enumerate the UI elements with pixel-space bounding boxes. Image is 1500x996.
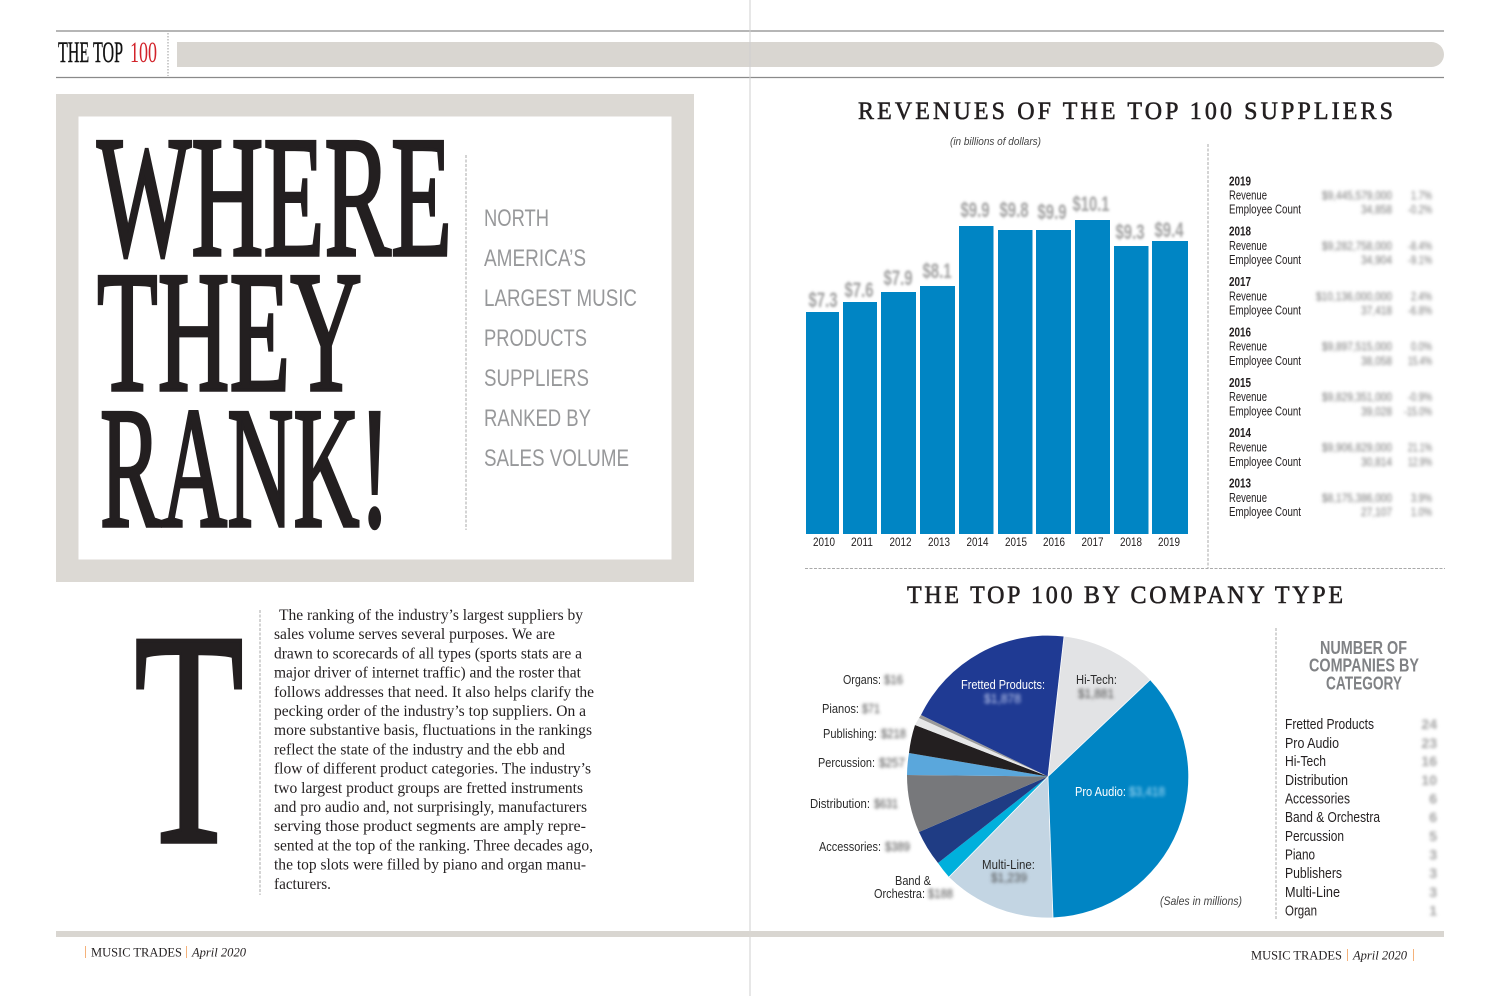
table: revenue and employee count by year: 2013 [1229, 476, 1251, 490]
subtitle: RANKED BY [484, 405, 591, 432]
category list: Multi-Line [1285, 885, 1340, 901]
table: revenue and employee count by year: $9,445,579,000 [1322, 188, 1392, 202]
subtitle: AMERICA’S [484, 245, 586, 272]
subtitle: LARGEST MUSIC [484, 285, 637, 312]
category values: 16 [1421, 753, 1437, 769]
table: revenue and employee count by year: 30,814 [1361, 455, 1392, 469]
table: revenue and employee count by year: Employee Count [1229, 404, 1301, 418]
bar values [808, 193, 1184, 312]
category heading [1309, 638, 1419, 694]
table: revenue and employee count by year: 12.9% [1408, 455, 1432, 469]
pie labels: Hi-Tech: [1076, 672, 1117, 687]
footer left: MUSIC TRADES [91, 944, 182, 960]
bar values: $9.3 [1116, 221, 1144, 244]
table: revenue and employee count by year: 27,107 [1361, 505, 1392, 519]
footer left [85, 944, 246, 960]
bar years [813, 535, 1180, 549]
table: revenue and employee count by year: 2.4% [1411, 290, 1432, 304]
table: revenue and employee count by year: 21.1% [1408, 440, 1432, 454]
body text: serving those product segments are amply repre- [274, 818, 586, 835]
footer right: MUSIC TRADES [1251, 948, 1342, 962]
table: revenue and employee count by year: -9.1% [1408, 253, 1432, 267]
table: revenue and employee count by year: Employee Count [1229, 304, 1301, 318]
category list: Organ [1285, 904, 1317, 920]
bar years: 2010 [813, 535, 835, 549]
table: revenue and employee count by year: Revenue [1229, 491, 1267, 505]
table: revenue and employee count by year: -0.2% [1408, 202, 1432, 216]
category values: 3 [1429, 884, 1437, 900]
table: revenue and employee count by year: $10,136,000,000 [1316, 290, 1392, 304]
body text: flow of different product categories. The industry’s [274, 761, 591, 778]
pie labels: Percussion: [818, 755, 875, 770]
bar years: 2014 [966, 535, 989, 549]
pie labels: Publishing: [823, 726, 877, 741]
pie labels: $71 [862, 701, 880, 716]
table: revenue and employee count by year: 39,028 [1361, 404, 1392, 418]
pie labels: $631 [874, 796, 898, 811]
table: revenue and employee count by year: $9,829,351,000 [1322, 390, 1392, 404]
table: revenue and employee count by year: 34,858 [1361, 202, 1392, 216]
subtitle: SALES VOLUME [484, 445, 629, 472]
category list [1285, 717, 1381, 920]
footer left: April 2020 [191, 944, 246, 960]
subtitle: PRODUCTS [484, 325, 587, 352]
pie labels: Pianos: [822, 701, 859, 716]
pie labels: $16 [884, 672, 903, 687]
footer right: April 2020 [1352, 948, 1407, 962]
category values: 6 [1429, 790, 1437, 806]
table: revenue and employee count by year: -0.9% [1408, 390, 1432, 404]
pie labels: $218 [881, 726, 906, 741]
table: revenue and employee count by year: 2017 [1229, 275, 1251, 289]
category heading: CATEGORY [1326, 674, 1402, 694]
table: revenue and employee count by year: Employee Count [1229, 505, 1301, 519]
table: revenue and employee count by year: Revenue [1229, 340, 1267, 354]
panel: title block [56, 94, 694, 582]
table: revenue and employee count by year: 1.7% [1411, 188, 1432, 202]
category list: Publishers [1285, 866, 1342, 882]
table: revenue and employee count by year: 1.0% [1411, 505, 1432, 519]
chart unit note: (in billions of dollars) [950, 136, 1041, 148]
body text: and pro audio and, not surprisingly, manufacturers [274, 799, 587, 816]
table: revenue and employee count by year: Employee Count [1229, 354, 1301, 368]
category values: 1 [1429, 902, 1437, 918]
table: revenue and employee count by year: 34,904 [1361, 253, 1392, 267]
bar values: $7.9 [884, 267, 912, 290]
pie labels: $1,878 [984, 691, 1021, 706]
bar values: $8.1 [922, 260, 952, 283]
bar values: $10.1 [1072, 193, 1110, 216]
headline: where they rank: WHERE [97, 102, 452, 293]
pie labels: Multi-Line: [982, 857, 1035, 872]
body text: follows addresses that need. It also helps clarify the [274, 684, 594, 701]
body text: sales volume serves several purposes. We are [274, 626, 555, 643]
bar years: 2013 [928, 535, 950, 549]
category values: 6 [1429, 809, 1437, 825]
pie labels: Accessories: [819, 839, 881, 854]
pie labels: $1,239 [991, 870, 1027, 885]
pie labels: Fretted Products: [961, 677, 1045, 692]
pie labels: Organs: [843, 672, 881, 687]
category heading: COMPANIES BY [1309, 656, 1419, 676]
pie chart: sales by company type [810, 636, 1188, 918]
subtitle: NORTH [484, 205, 549, 232]
category list: Band & Orchestra [1285, 810, 1381, 826]
body text: the top slots were filled by piano and organ manu- [274, 857, 586, 874]
table: revenue and employee count by year: Employee Count [1229, 253, 1301, 267]
category list: Distribution [1285, 773, 1348, 789]
table: revenue and employee count by year: 15.4% [1408, 354, 1432, 368]
table: revenue and employee count by year: $9,906,829,000 [1322, 440, 1392, 454]
panel: number of companies by category [1285, 638, 1437, 920]
pie labels: Pro Audio: [1075, 784, 1126, 799]
pie labels: $188 [928, 886, 953, 901]
heading: revenues: REVENUES OF THE TOP 100 SUPPLIERS [858, 97, 1393, 125]
body text: sented at the top of the ranking. Three decades ago, [274, 837, 593, 854]
body text: two largest product groups are fretted instruments [274, 780, 583, 797]
bar values: $9.9 [1038, 201, 1066, 224]
body text: major driver of internet traffic) and the roster that [274, 665, 582, 682]
pie labels: Band & [895, 873, 931, 888]
heading: company type: THE TOP 100 BY COMPANY TYPE [907, 581, 1343, 609]
category values [1421, 716, 1437, 918]
category list: Hi-Tech [1285, 754, 1326, 770]
category values: 24 [1421, 716, 1437, 732]
table: revenue and employee count by year: 37,418 [1361, 304, 1392, 318]
table: revenue and employee count by year: $9,282,758,000 [1322, 239, 1392, 253]
table: revenue and employee count by year: Employee Count [1229, 202, 1301, 216]
table: revenue and employee count by year: 2019 [1229, 174, 1251, 188]
header band [56, 31, 1444, 78]
bar years: 2016 [1043, 535, 1065, 549]
pie unit note: (Sales in millions) [1160, 894, 1242, 908]
pie labels: Distribution: [810, 796, 870, 811]
table: revenue and employee count by year: Revenue [1229, 440, 1267, 454]
category list: Accessories [1285, 792, 1350, 808]
body text: more substantive basis, fluctuations in the rankings [274, 722, 592, 739]
bar years: 2012 [890, 535, 912, 549]
body text: drawn to scorecards of all types (sports stats are a [274, 645, 582, 662]
table: revenue and employee count by year: $8,175,386,000 [1322, 491, 1392, 505]
header title: THE TOP [58, 36, 123, 69]
table: revenue and employee count by year: Revenue [1229, 188, 1267, 202]
table: revenue and employee count by year: -6.8% [1408, 304, 1432, 318]
table: revenue and employee count by year: Employee Count [1229, 455, 1301, 469]
bar values: $7.3 [808, 289, 838, 312]
bar chart: revenues [806, 193, 1188, 549]
subtitle [484, 205, 637, 472]
category list: Pro Audio [1285, 736, 1339, 752]
body text [274, 607, 594, 893]
category values: 3 [1429, 865, 1437, 881]
pie labels [810, 672, 1165, 901]
pie labels: $1,881 [1078, 686, 1114, 701]
footer bar [56, 931, 1444, 937]
pie labels: Orchestra: [874, 886, 925, 901]
pie labels: $3,418 [1129, 784, 1165, 799]
subtitle: SUPPLIERS [484, 365, 589, 392]
headline: where they rank [97, 102, 452, 564]
table: revenue and employee count by year: Revenue [1229, 390, 1267, 404]
body text: reflect the state of the industry and the ebb and [274, 741, 565, 758]
bar values: $9.4 [1154, 219, 1184, 242]
header pill bar [177, 42, 1444, 67]
table: revenue and employee count by year: 0.0% [1411, 340, 1432, 354]
table: revenue and employee count by year: Revenue [1229, 239, 1267, 253]
table: revenue and employee count by year: 2015 [1229, 376, 1251, 390]
bar years: 2019 [1158, 535, 1180, 549]
table: revenue and employee count by year: 3.9% [1411, 491, 1432, 505]
table: revenue and employee count by year: 2016 [1229, 326, 1251, 340]
bar years: 2011 [851, 535, 873, 549]
body text: facturers. [274, 876, 331, 893]
bar years: 2018 [1120, 535, 1142, 549]
bar values: $9.8 [1000, 199, 1029, 222]
category values: 3 [1429, 846, 1437, 862]
table: revenue and employee count by year: 2014 [1229, 426, 1251, 440]
body text: The ranking of the industry’s largest suppliers by [279, 607, 583, 624]
bar values: $7.6 [844, 279, 874, 302]
headline: where they rank: THEY [97, 237, 362, 428]
category values: 23 [1421, 735, 1437, 751]
table: revenue and employee count by year: Revenue [1229, 290, 1267, 304]
bar years: 2017 [1082, 535, 1104, 549]
body text: pecking order of the industry’s top suppliers. On a [274, 703, 586, 720]
table: revenue and employee count by year: $9,897,515,000 [1322, 340, 1392, 354]
drop cap: T [134, 568, 244, 909]
header number: 100 [130, 36, 157, 69]
bar values: $9.9 [960, 199, 990, 222]
pie labels: $257 [879, 755, 905, 770]
category list: Percussion [1285, 829, 1344, 845]
category list: Piano [1285, 848, 1315, 864]
bar years: 2015 [1005, 535, 1027, 549]
table: revenue and employee count by year: 2018 [1229, 224, 1251, 238]
table: revenue and employee count by year: 38,058 [1361, 354, 1392, 368]
headline: where they rank: RANK! [100, 373, 390, 564]
center fold [749, 0, 751, 996]
table: revenue and employee count by year: -8.4% [1408, 239, 1432, 253]
table: revenue and employee count by year: -15.0% [1404, 404, 1432, 418]
category list: Fretted Products [1285, 717, 1374, 733]
footer right [1251, 948, 1414, 962]
table: revenue and employee count by year [1229, 174, 1432, 519]
category values: 5 [1429, 828, 1437, 844]
category values: 10 [1421, 772, 1437, 788]
pie labels: $389 [885, 839, 910, 854]
category heading: NUMBER OF [1320, 638, 1407, 658]
